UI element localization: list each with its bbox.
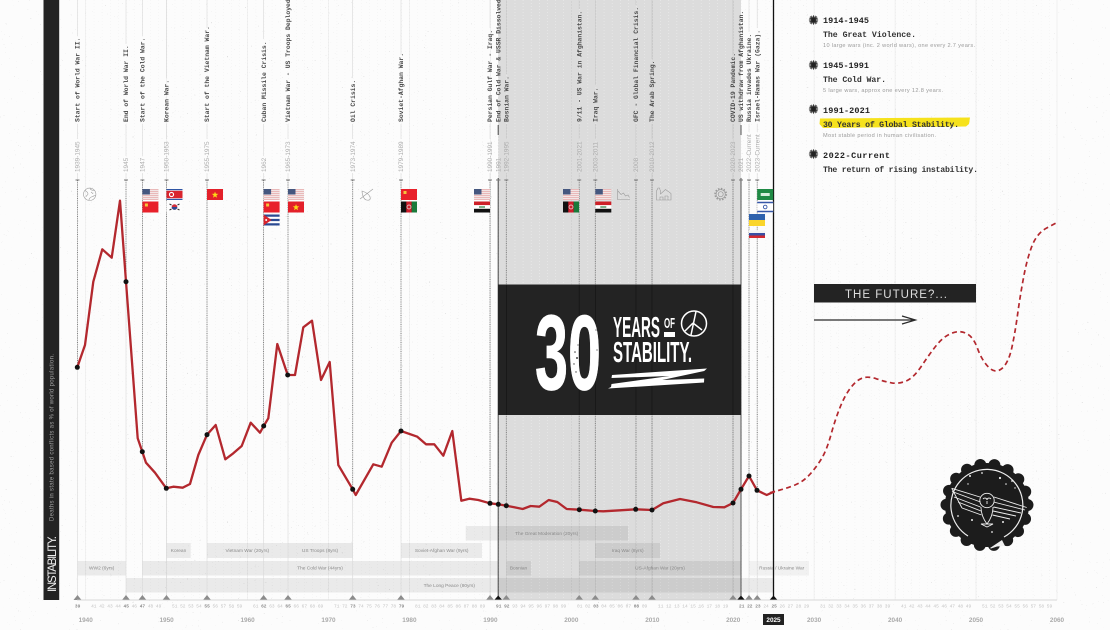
conflict duration bars [78, 526, 809, 592]
year ticks: 11 12 13 14 15 16 17 18 19 [658, 604, 729, 610]
year ticks: 41 42 43 44 45 46 47 48 49 [901, 604, 972, 610]
decade labels: 1990 [483, 617, 498, 624]
event: End of World War II [122, 0, 130, 600]
flags: Iraq War [595, 189, 611, 212]
decade labels: 2040 [888, 617, 903, 624]
chart: deaths line [75, 201, 774, 513]
arrow: future [814, 316, 916, 324]
event dots [75, 279, 760, 514]
year ticks: 91 92 93 94 95 96 97 98 99 [496, 604, 567, 610]
event: Bosnian War: 1992-1995 [504, 141, 510, 172]
event: End of Cold War and USSR Dissolved: 1991 [495, 157, 502, 172]
bar: Vietnam War: Vietnam War (20yrs) [225, 548, 270, 554]
panel: 30 years of stability [498, 284, 741, 415]
stability band [498, 0, 741, 600]
axis title: INSTABILITY. [47, 536, 59, 592]
bar: Soviet-Afghan War: Soviet-Afghan War (9yrs) [415, 548, 469, 554]
era 1945-1991: 1945-1991 [823, 61, 869, 71]
year ticks: 71 72 73 74 75 76 77 78 79 [334, 604, 405, 610]
event: Cuban Missile Crisis [260, 0, 268, 600]
decade labels [79, 617, 1065, 624]
panel: 30 years of stability: YEARS [613, 312, 660, 344]
current year badge: 2025 [766, 617, 781, 624]
event: End of World War II: 1945 [123, 157, 130, 172]
callout: the future [814, 284, 976, 302]
event: Persian Gulf War: 1990-1991 [487, 141, 494, 172]
flags: Soviet-Afghan War [401, 189, 417, 212]
bar: The Great Moderation: The Great Moderation (20yrs) [515, 531, 579, 537]
decade labels: 2000 [564, 617, 579, 624]
bar: Russia / Ukraine War [749, 561, 809, 576]
bar: Korean: Korean [171, 548, 187, 554]
current year line 2025 [770, 0, 778, 600]
event: Russia invades Ukraine [745, 0, 753, 600]
icon: falling chart [618, 189, 630, 200]
bar: US-Afghan War: US-Afghan War (20yrs) [635, 566, 685, 572]
year ticks: 31 32 33 34 35 36 37 38 39 [820, 604, 891, 610]
bar: Bosnian [506, 561, 531, 576]
event: Start of World War II: Start of World War II. [75, 38, 82, 122]
panel: 30 years of stability: OF [664, 316, 675, 332]
decade labels: 1950 [159, 617, 174, 624]
era 1991-2021 [809, 104, 959, 139]
year ticks: 01 02 03 04 05 06 07 08 09 [577, 604, 648, 610]
owl [952, 488, 1027, 527]
event: The Arab Spring: 2010-2012 [649, 141, 656, 172]
seal: owl badge [945, 463, 1029, 548]
event: Soviet-Afghan War [397, 0, 405, 600]
brush stroke [608, 368, 707, 388]
era 2022-Current: 2022-Current [823, 151, 890, 161]
icon: gear [715, 189, 726, 200]
event: Oil Crisis [349, 0, 357, 600]
year ticks: 61 62 63 64 65 66 67 68 69 [253, 604, 324, 610]
event: Start of the Cold War: 1947 [140, 157, 147, 172]
bar: Russia / Ukraine War: Russia / Ukraine War [759, 566, 805, 572]
event: Cuban Missile Crisis: 1962 [261, 157, 268, 172]
era 1945-1991: 5 large wars, approx one every 12.8 years. [823, 88, 943, 94]
event: Start of World War II [74, 0, 82, 600]
event: COVID-19 Pandemic [729, 0, 737, 600]
legend: eras [809, 15, 978, 175]
event: The Arab Spring: The Arab Spring. [649, 61, 656, 122]
flags: Persian Gulf War [474, 189, 490, 212]
event: Bosnian War: Bosnian War. [504, 76, 510, 122]
number 30 [535, 292, 601, 412]
event: 9/11 US War in Afghanistan: 9/11 - US War in Afghanistan. [576, 11, 583, 122]
decade labels: 2020 [726, 617, 741, 624]
event: Start of the Vietnam War: 1955-1975 [204, 141, 211, 172]
decade labels: 1980 [402, 617, 417, 624]
year ticks: 21 22 23 24 25 26 27 28 29 [739, 604, 810, 610]
event: Cuban Missile Crisis: Cuban Missile Crisis. [261, 41, 268, 122]
bar: Iraq War: Iraq War (8yrs) [612, 548, 644, 554]
current year badge [763, 614, 784, 625]
era 1945-1991: The Cold War. [823, 75, 886, 85]
decade labels: 2050 [969, 617, 984, 624]
event: Oil Crisis: 1973-1974 [350, 141, 357, 172]
flags: Russia and Ukraine [749, 214, 765, 238]
number 30: 30 [535, 292, 601, 412]
event: Israel-Hamas War [753, 0, 761, 600]
era 1914-1945: The Great Violence. [823, 30, 916, 40]
bar: The Long Peace [126, 578, 773, 592]
flags: Korean War [166, 189, 182, 212]
callout: the future: THE FUTURE?... [845, 289, 947, 301]
year ticks: 51 52 53 54 55 56 57 58 59 [172, 604, 243, 610]
bar: The Cold War: The Cold War (44yrs) [297, 566, 343, 572]
event: Russia invades Ukraine: Russia invades Ukraine. [746, 34, 753, 122]
year ticks: 81 82 83 84 85 86 87 88 89 [415, 604, 486, 610]
highlight [820, 118, 970, 128]
event: Oil Crisis: Oil Crisis. [350, 80, 357, 122]
decade labels: 2010 [645, 617, 660, 624]
icon: oil drop crossed [360, 189, 373, 200]
bar: Vietnam War [207, 543, 288, 558]
event: 9/11 US War in Afghanistan [575, 0, 583, 600]
icon: factory [656, 188, 671, 200]
decade labels: 1960 [240, 617, 255, 624]
event: Start of the Vietnam War [203, 0, 211, 600]
event: Korean War: 1950-1953 [164, 141, 171, 172]
era 1991-2021: Most stable period in human civilisation. [823, 133, 936, 139]
bar: WW2: WW2 (6yrs) [89, 566, 115, 572]
bar: US Troops [288, 543, 353, 558]
bar: The Cold War [142, 561, 498, 576]
bar: US-Afghan War [579, 561, 741, 576]
decade labels: 2060 [1050, 617, 1065, 624]
bar: Korean [166, 543, 191, 558]
bar: WW2 [78, 561, 126, 576]
event: Russia invades Ukraine: 2022-Current [746, 134, 753, 172]
event: Bosnian War [502, 0, 510, 600]
event: Iraq War [591, 0, 600, 600]
era 2022-Current: The return of rising instability. [823, 165, 978, 175]
icon: globe [84, 188, 96, 200]
event: Start of the Cold War [138, 0, 147, 600]
year ticks: 51 52 53 54 55 56 57 58 59 [982, 604, 1053, 610]
era 2022-Current [809, 149, 978, 175]
era 1914-1945: 1914-1945 [823, 16, 869, 26]
event: COVID-19 Pandemic: COVID-19 Pandemic. [730, 53, 737, 122]
event: Korean War [162, 0, 171, 600]
side bar: instability label [44, 0, 59, 600]
bar: Soviet-Afghan War [401, 543, 482, 558]
era 1914-1945: 10 large wars (inc. 2 world wars), one every 2.7 years. [823, 43, 975, 49]
flags: US War in Afghanistan [563, 189, 579, 212]
flags: Israel-Hamas War [757, 189, 773, 212]
speckle wear [957, 472, 1016, 548]
flags: Cuban Missile Crisis [264, 189, 280, 226]
event: Israel-Hamas War: Israel-Hamas War (Gaza). [754, 30, 761, 122]
event: Start of the Cold War: Start of the Cold War. [140, 38, 147, 122]
bar: The Great Moderation [466, 526, 628, 540]
timeline axis [75, 600, 1065, 625]
event: US withdraw from Afghanistan: 2021 [738, 157, 745, 172]
year ticks [75, 604, 1053, 610]
year ticks: 39 [75, 604, 81, 610]
event: US withdraw from Afghanistan: US withdraw from Afghanistan. [738, 11, 745, 122]
chart: future dashed projection [770, 223, 1057, 493]
event: Start of World War II: 1939-1945 [75, 141, 82, 172]
bar: Bosnian: Bosnian [510, 566, 527, 572]
event: Persian Gulf War [486, 0, 494, 600]
event: COVID-19 Pandemic: 2020-2023 [730, 141, 737, 172]
event: Korean War: Korean War. [164, 80, 171, 122]
event: Global Financial Crisis: GFC - Global Financial Crisis. [633, 7, 640, 122]
flag: Vietnam [207, 189, 223, 200]
event: US withdraw from Afghanistan [737, 11, 745, 600]
decade labels: 2030 [807, 617, 822, 624]
era 1991-2021: 1991-2021 [823, 106, 870, 116]
axis caption: Deaths in state based conflicts as % of world population. [50, 354, 56, 521]
panel: 30 years of stability: STABILITY. [613, 337, 692, 369]
event: Persian Gulf War: Persian Gulf War - Iraq. [487, 30, 494, 122]
event: Start of the Vietnam War: Start of the Vietnam War. [204, 26, 211, 122]
bar: Iraq War [595, 543, 660, 558]
era 1914-1945 [809, 15, 975, 49]
era 1991-2021: 30 Years of Global Stability. [823, 120, 959, 130]
flags: Vietnam War [288, 189, 304, 212]
event: End of World War II: End of World War II. [123, 45, 130, 122]
event: Vietnam War US Troops Deployed: 1965-1973 [285, 141, 292, 172]
event: 9/11 US War in Afghanistan: 2001-2021 [576, 141, 583, 172]
event: Israel-Hamas War: 2023-Current [754, 134, 761, 172]
decade labels: 1970 [321, 617, 336, 624]
event: Iraq War: 2003-2011 [592, 141, 600, 172]
event: End of Cold War and USSR Dissolved [494, 0, 502, 600]
icon: peace sign [682, 311, 706, 336]
event: Global Financial Crisis: 2008 [633, 157, 640, 172]
event: Vietnam War US Troops Deployed [284, 0, 292, 600]
event: Iraq War: Iraq War. [592, 87, 600, 122]
event: Soviet-Afghan War: 1979-1989 [398, 141, 405, 172]
event: Soviet-Afghan War: Soviet-Afghan War. [398, 53, 405, 122]
bar: US Troops: US Troops (8yrs) [302, 548, 339, 554]
year ticks: 41 42 43 44 45 46 47 48 49 [91, 604, 162, 610]
event: Global Financial Crisis [632, 0, 640, 600]
decade labels: 1940 [79, 617, 93, 624]
event: The Arab Spring [648, 0, 656, 600]
era 1945-1991 [809, 60, 943, 94]
flags: start of Cold War [142, 189, 158, 212]
bar: The Long Peace: The Long Peace (80yrs) [424, 583, 475, 589]
